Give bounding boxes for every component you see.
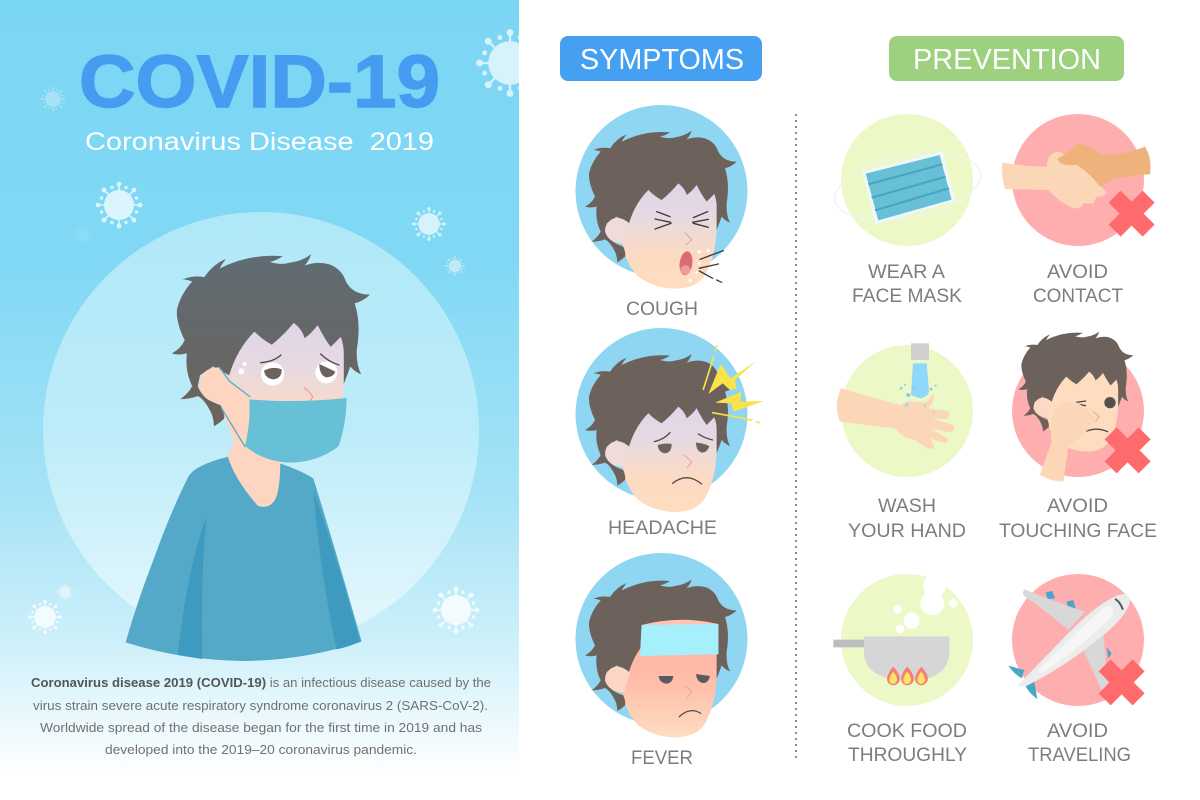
prevention: cook food thoroughly	[833, 574, 973, 766]
icon: surgical mask	[829, 142, 986, 231]
head illustration with pained face	[585, 354, 737, 512]
symptom: cough	[576, 105, 748, 320]
prevention: avoid contact	[1002, 114, 1155, 307]
pained facial features and lightning	[654, 346, 764, 484]
head illustration with flushed face	[585, 579, 737, 737]
icon: pan over flame with steam	[833, 575, 958, 685]
symptom: fever	[576, 553, 748, 769]
head illustration with cough face	[585, 131, 737, 289]
prevention: wear a face mask: FACE MASK	[852, 286, 962, 307]
description paragraph: developed into the 2019–20 coronavirus pandemic.	[105, 742, 417, 757]
virus particles	[28, 29, 544, 634]
title: COVID-19	[79, 40, 440, 123]
body	[126, 457, 362, 661]
label: WASH	[878, 496, 936, 517]
label: AVOID	[1047, 262, 1108, 283]
label: COOK FOOD	[847, 721, 967, 742]
label: COUGH	[626, 299, 698, 320]
label: WEAR A	[868, 262, 945, 283]
label: FEVER	[631, 748, 693, 769]
panel: left disease overview	[0, 0, 544, 800]
neck	[228, 440, 280, 507]
prevention: avoid touching face: TOUCHING FACE	[999, 521, 1157, 542]
symptom: headache	[576, 328, 764, 539]
facial features, hand and cross	[1040, 397, 1151, 482]
facial features and mask	[199, 354, 347, 463]
heading: prevention	[889, 36, 1124, 81]
prevention: avoid contact: CONTACT	[1033, 286, 1123, 307]
heading: symptoms: SYMPTOMS	[580, 44, 744, 76]
prevention: cook food thoroughly: THROUGHLY	[848, 745, 967, 766]
description paragraph: virus strain severe acute respiratory syndrome coronavirus 2 (SARS-CoV-2).	[33, 698, 488, 713]
prevention: wash your hand	[837, 343, 973, 542]
background disc	[43, 212, 479, 648]
prevention: wear a face mask	[829, 114, 986, 307]
label: AVOID	[1047, 721, 1108, 742]
heading: symptoms	[560, 36, 762, 81]
description paragraph: Worldwide spread of the disease began for the first time in 2019 and has	[40, 720, 483, 735]
prevention: avoid touching face	[999, 332, 1157, 542]
description paragraph: Coronavirus disease 2019 (COVID-19) is an infectious disease caused by the	[31, 675, 491, 690]
subtitle: Coronavirus Disease 2019	[85, 128, 434, 156]
prevention: wash your hand: YOUR HAND	[848, 521, 966, 542]
prevention: avoid traveling: TRAVELING	[1028, 745, 1131, 766]
hair and face	[172, 254, 370, 429]
cooling pad and facial features	[640, 620, 718, 717]
head touching eye	[1018, 332, 1133, 451]
icon: airplane with cross	[1008, 589, 1145, 705]
label: HEADACHE	[608, 518, 717, 539]
label: AVOID	[1047, 496, 1108, 517]
heading: prevention: PREVENTION	[913, 44, 1101, 76]
illustration: sick person wearing mask	[126, 254, 370, 661]
description paragraph	[31, 675, 491, 757]
icon: handshake with cross	[1002, 144, 1155, 237]
prevention: avoid traveling	[1008, 574, 1145, 766]
icon: hands under tap	[837, 343, 954, 449]
